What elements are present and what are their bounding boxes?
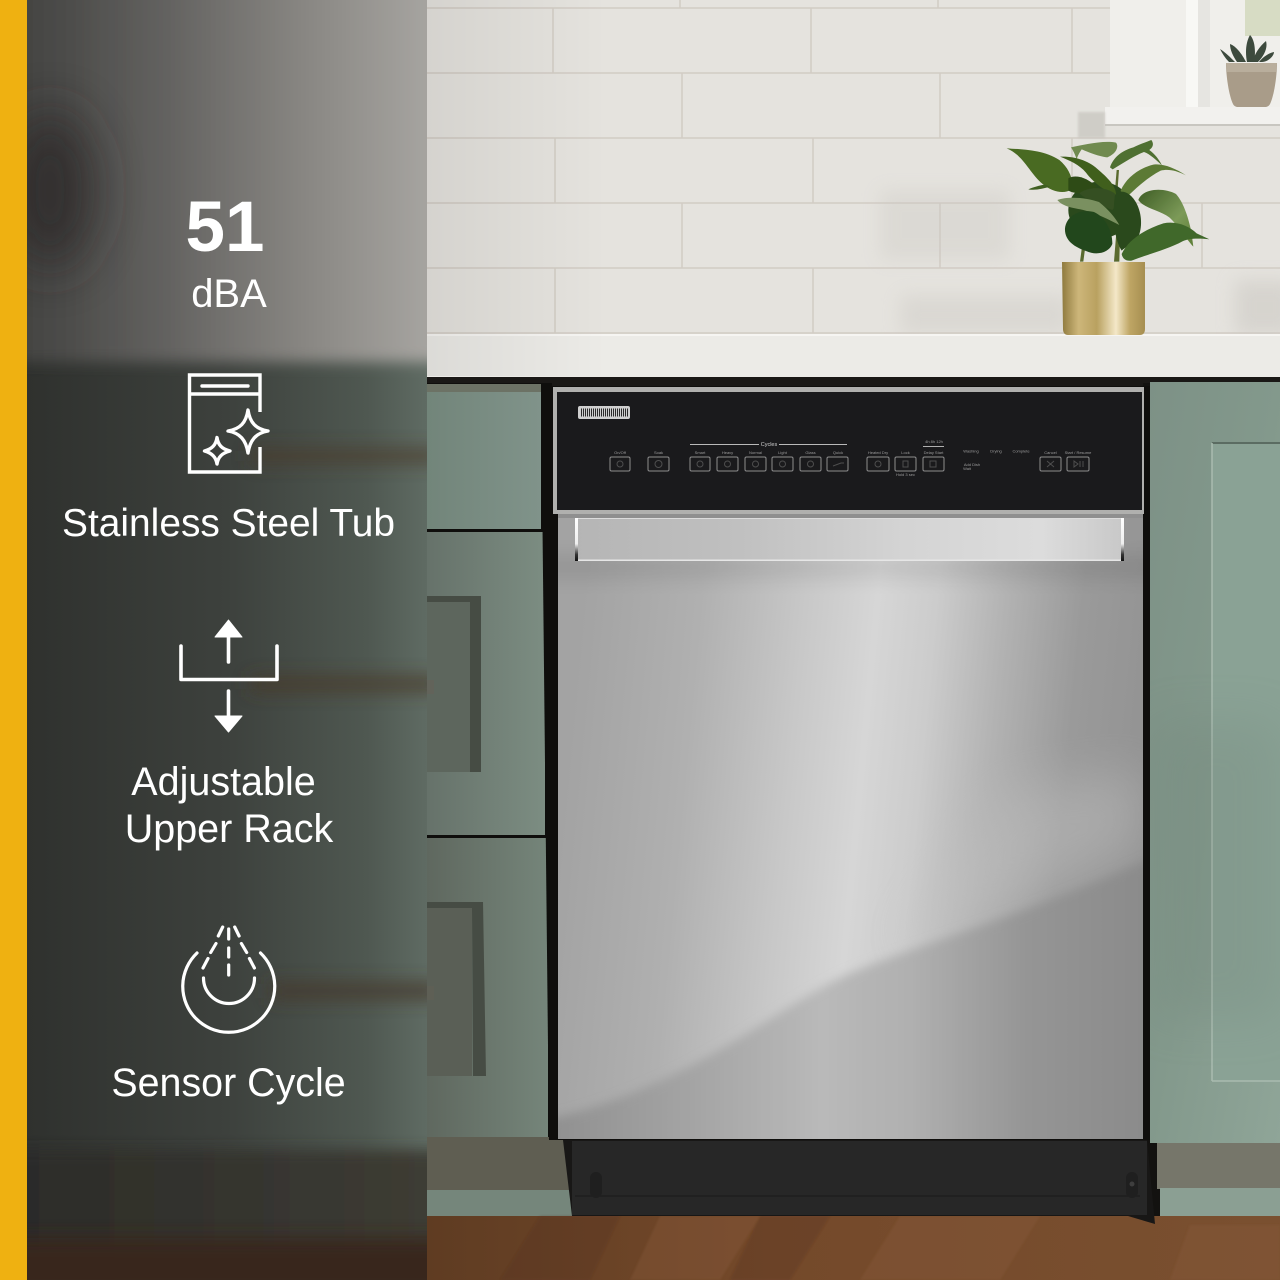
succulent in stone pot [1220, 35, 1277, 107]
icon: tub with sparkles [190, 375, 268, 472]
hour indicator lines [923, 446, 944, 448]
label: Sensor Cycle: Sensor Cycle [111, 1061, 346, 1105]
panel labels: Quick [833, 450, 843, 455]
model badge [578, 406, 630, 419]
blurred side panel background [27, 0, 427, 1280]
panel labels: Cycles [761, 442, 777, 448]
feature: adjustable upper rack [125, 620, 334, 851]
panel labels: On/Off [614, 450, 627, 455]
yellow accent bar [0, 0, 27, 1280]
panel labels: Complete [1012, 448, 1030, 454]
cabinet door 1 [427, 384, 541, 529]
cabinet door 3 [427, 838, 548, 1137]
panel labels: Soak [654, 450, 663, 455]
panel labels: Delay Start [924, 450, 944, 455]
panel labels: Normal [749, 450, 762, 455]
value: 51: 51 [186, 188, 264, 267]
feature: 51 dBA [186, 188, 267, 316]
feature: sensor cycle [111, 927, 346, 1105]
icon: rack with up and down arrows [181, 620, 277, 732]
window trim and shelf [1078, 0, 1280, 138]
plant in gold pot [1007, 140, 1209, 335]
counter top [427, 334, 1280, 387]
feature: stainless steel tub [62, 375, 395, 545]
label: Adjustable Upper Rack: Adjustable [131, 760, 316, 804]
panel labels: Add Dish [964, 462, 980, 467]
panel labels: Hold 3 sec [896, 472, 915, 477]
panel labels: Smart [695, 450, 706, 455]
label: Adjustable Upper Rack: Upper Rack [125, 807, 334, 851]
toe kick [563, 1140, 1155, 1224]
panel labels: Light [778, 450, 788, 455]
gold pot [1062, 262, 1145, 335]
left cabinets [427, 383, 572, 1218]
panel labels: Heated Dry [868, 450, 888, 455]
panel labels: Cancel [1044, 450, 1057, 455]
door handle [575, 518, 1124, 561]
unit: dBA: dBA [191, 272, 267, 316]
kitchen photo: wall, counter, cabinets, floor [427, 0, 1280, 1280]
label: Stainless Steel Tub: Stainless Steel Tub [62, 502, 395, 545]
panel labels: Glass [805, 450, 816, 455]
panel labels: Drying [990, 448, 1002, 454]
panel labels: Wait [963, 466, 972, 471]
leaves [1007, 140, 1209, 262]
control panel [553, 387, 1144, 514]
brick wall [427, 0, 1280, 345]
hardwood floor [427, 1216, 1280, 1280]
panel labels: Start / Resume [1065, 450, 1092, 455]
panel labels [614, 439, 1092, 477]
label: Adjustable Upper Rack [125, 760, 334, 851]
icon: spray and sensor rings [183, 927, 275, 1032]
stainless door [558, 514, 1143, 1139]
cabinet door 2 [427, 532, 545, 835]
panel labels: Washing [963, 448, 979, 454]
cycles divider [690, 444, 847, 446]
control buttons [610, 457, 1089, 471]
dishwasher [520, 386, 1170, 1224]
panel labels: Lock [901, 450, 910, 455]
right cabinet [1143, 382, 1280, 1225]
panel labels: 4h 8h 12h [925, 439, 943, 444]
panel labels: Heavy [722, 450, 733, 455]
